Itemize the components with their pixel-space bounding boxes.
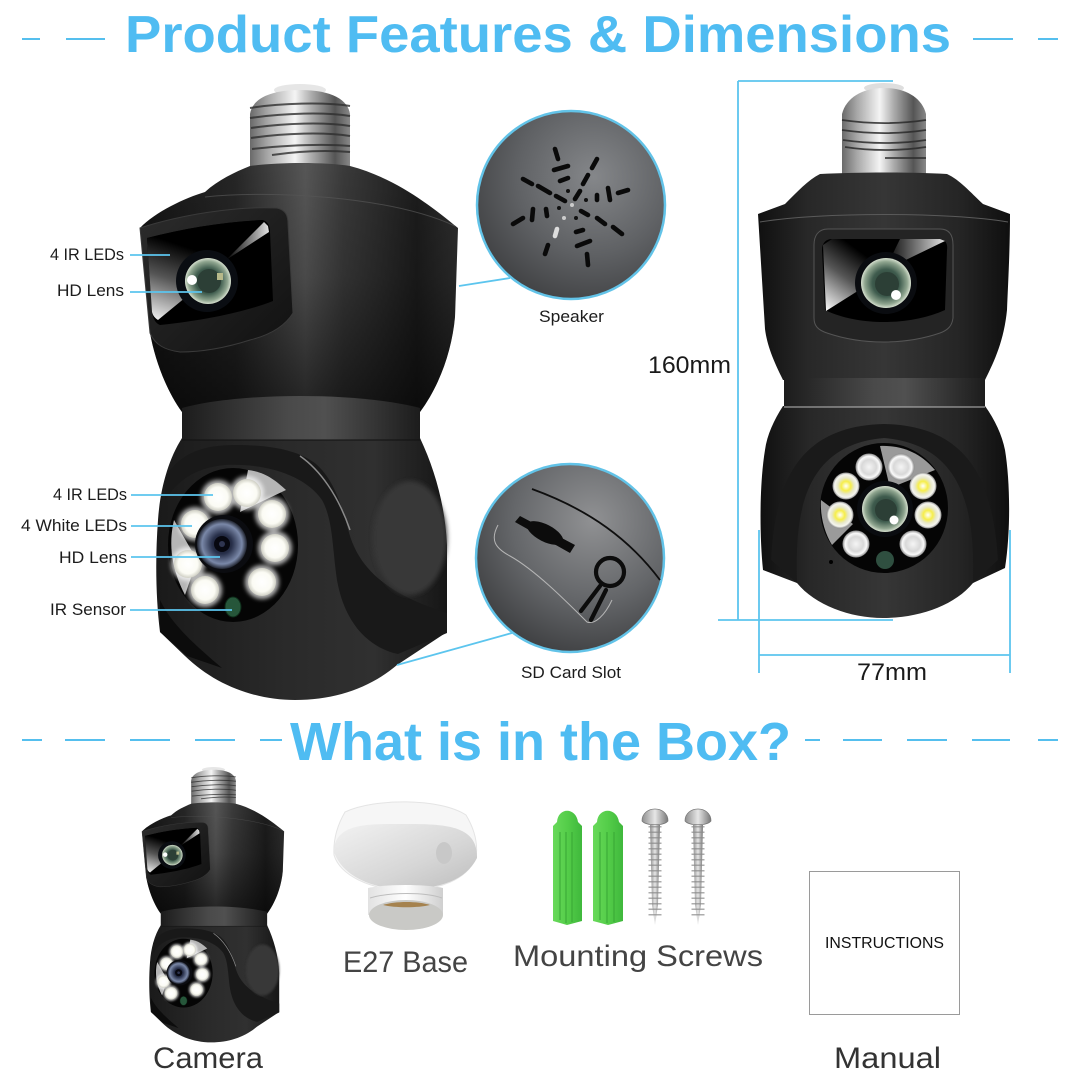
arch shoulder [771, 424, 998, 583]
raised panel outline [494, 525, 612, 623]
LEDs [174, 479, 289, 604]
screw 1 [642, 809, 668, 925]
title: Product Features & Dimensions [125, 6, 951, 64]
box item: mounting screws: Mounting Screws [513, 940, 763, 973]
bulb screw base [842, 83, 926, 176]
upper lens window [140, 208, 293, 352]
front camera labels: HD Lens [57, 281, 124, 300]
section heading: what is in the box: What is in the Box? [290, 712, 791, 772]
card slot [515, 516, 575, 553]
lower-left edge [160, 600, 222, 668]
lower body [156, 438, 447, 700]
screw 2 [685, 809, 711, 925]
rim seam [760, 214, 1008, 222]
panel: SD card slot close-up [476, 464, 664, 652]
round side recess [373, 481, 447, 595]
upper rim seam [205, 194, 455, 226]
IR sensor [225, 597, 241, 617]
mic hole [829, 560, 833, 564]
height dimension: 160mm [648, 352, 731, 379]
LED lens panel [168, 468, 298, 622]
box item: manual [810, 872, 960, 1075]
box item: manual: Manual [834, 1042, 941, 1075]
swoosh highlight [300, 456, 350, 530]
front camera labels: 4 White LEDs [21, 516, 127, 535]
lower body [761, 406, 1009, 618]
box item: camera: Camera [153, 1042, 263, 1075]
front camera with labelled parts [140, 84, 458, 700]
upper lens [855, 252, 917, 314]
upper body [140, 163, 458, 412]
front camera labels: 4 IR LEDs [53, 485, 127, 504]
side camera front view [758, 83, 1010, 618]
box item: manual: INSTRUCTIONS [825, 935, 944, 952]
upper body [758, 172, 1010, 380]
wall plug 1 [553, 811, 582, 925]
upper lens window [814, 229, 953, 342]
wall plug 2 [593, 811, 623, 925]
bulb screw base [250, 84, 350, 168]
box item: E27 base [334, 802, 477, 979]
speaker slots [513, 149, 628, 265]
front camera labels [21, 245, 127, 619]
front camera labels: IR Sensor [50, 600, 126, 619]
IR sensor [876, 551, 894, 569]
lower lens [195, 515, 253, 573]
collar [784, 378, 985, 407]
box item: mounting screws [513, 809, 763, 973]
seam [532, 489, 660, 580]
LED lens panel [820, 443, 948, 573]
LEDs [826, 454, 942, 558]
width dimension: 77mm [857, 659, 927, 686]
front camera labels: HD Lens [59, 548, 127, 567]
upper body vertical shading [140, 166, 458, 412]
panel: speaker close-up [477, 111, 665, 299]
upper lens [176, 250, 238, 312]
front camera labels: 4 IR LEDs [50, 245, 124, 264]
lower lens [857, 481, 913, 537]
box item: camera [142, 767, 284, 1075]
SD label: SD Card Slot [521, 663, 621, 682]
collar [182, 396, 420, 440]
swoosh shoulder [165, 445, 447, 654]
box item: E27 base: E27 Base [343, 946, 468, 979]
speaker label: Speaker [539, 307, 604, 326]
keyhole [581, 558, 624, 620]
leader lines: front camera [130, 255, 512, 665]
dimension lines [718, 81, 1010, 673]
